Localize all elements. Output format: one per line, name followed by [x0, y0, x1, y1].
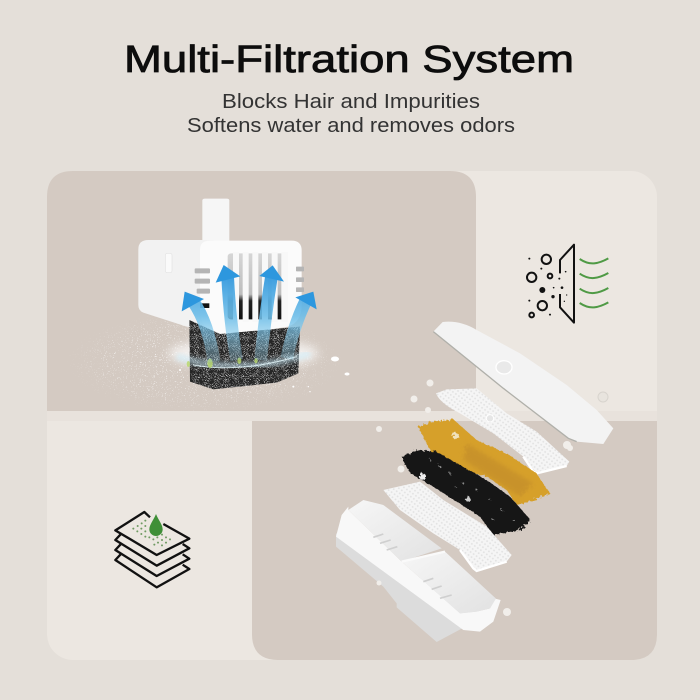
- pump side vents: [195, 267, 304, 294]
- pump outlet pipe: [202, 199, 229, 243]
- icon: stacked filter layers with water drop: [115, 512, 189, 587]
- illustration: exploded filter cartridge: [336, 322, 613, 642]
- pump vent grille: [228, 252, 288, 322]
- upper mesh pad: [436, 388, 569, 473]
- water glow band: [177, 353, 310, 366]
- title: Multi-Filtration System: [124, 39, 574, 81]
- white filter tray: [336, 500, 501, 642]
- pump front face: [200, 241, 302, 337]
- subtitle: [187, 91, 515, 137]
- illustration: water pump with sponge: [138, 199, 349, 392]
- blue airflow arrows: [182, 265, 317, 362]
- water droplets: [331, 356, 608, 616]
- top white filter sheet: [433, 322, 613, 444]
- panel: light backing grid: [47, 171, 657, 660]
- dust cloud around pump: [78, 319, 334, 410]
- panel: bottom-right dark: [252, 421, 657, 660]
- subtitle: Blocks Hair and Impurities: [222, 91, 480, 113]
- panel: top-left dark: [47, 171, 476, 411]
- panel: divider strip: [47, 411, 657, 421]
- subtitle: Softens water and removes odors: [187, 115, 515, 137]
- glow ring: [168, 339, 318, 368]
- sponge filter: [187, 318, 302, 392]
- gold resin filter: [418, 419, 550, 505]
- stray particles: [159, 357, 349, 392]
- lower mesh pad: [383, 482, 512, 571]
- icon: filter with particles and clean water: [527, 245, 608, 323]
- black carbon filter: [402, 450, 531, 535]
- pump side block: [138, 240, 213, 330]
